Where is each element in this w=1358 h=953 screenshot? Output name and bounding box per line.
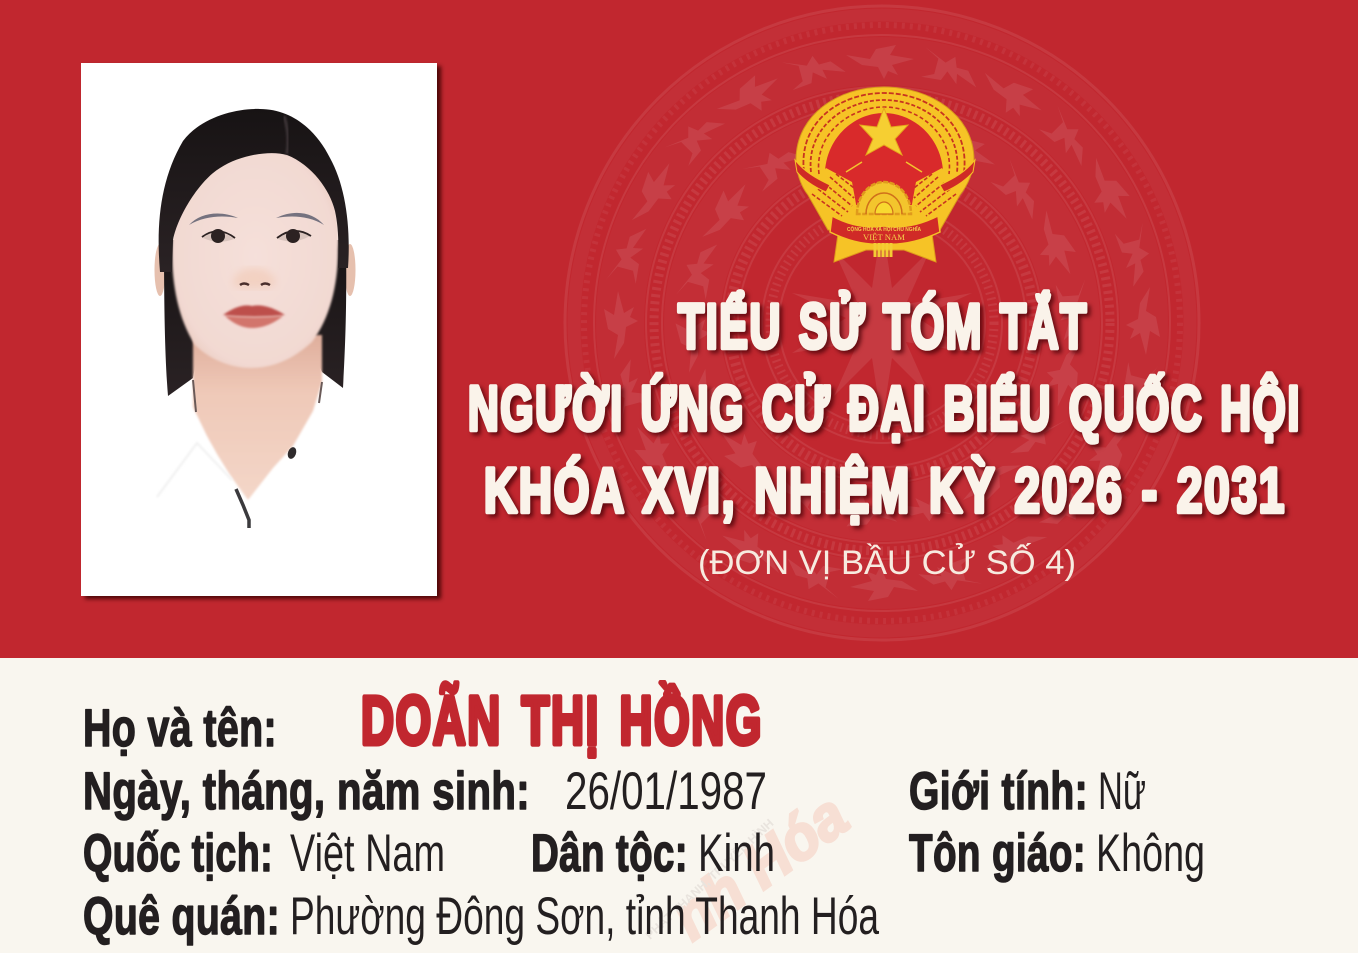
inner red disc — [825, 113, 943, 205]
base stripes — [834, 234, 936, 262]
watermark: Thanh Hóa: nh Hóa — [660, 781, 860, 953]
candidate name: DOÃN THỊ HỒNG — [361, 682, 763, 759]
label: full name: Họ và tên: — [83, 699, 277, 758]
value: ethnicity: Kinh — [698, 824, 775, 883]
wheat grain texture outer — [803, 93, 965, 172]
lips — [223, 305, 285, 328]
value: religion: Không — [1096, 824, 1205, 883]
wheat grain lines — [812, 174, 956, 216]
wheat grain texture middle — [811, 100, 957, 172]
national emblem — [795, 87, 975, 262]
hair parting — [284, 116, 288, 154]
biography fields — [83, 682, 1205, 946]
wheat grain texture inner — [819, 107, 949, 174]
back hair — [164, 240, 346, 396]
title line 1: TIỂU SỬ TÓM TẮT — [678, 291, 1088, 362]
red ribbons on wheat — [795, 160, 975, 192]
gear semicircle — [857, 182, 911, 214]
label: hometown: Quê quán: — [83, 887, 280, 946]
portrait photo — [81, 63, 437, 596]
wreath outer disc — [796, 87, 974, 230]
face — [172, 144, 339, 368]
panel: red header — [0, 0, 1358, 658]
wheat stems — [846, 162, 922, 172]
label: nationality: Quốc tịch: — [83, 824, 273, 883]
value: hometown: Phường Đông Sơn, tỉnh Thanh Hóa — [290, 887, 879, 946]
watermark: Thanh Hóa: PHÁT THANH, TRUYỀN HÌNH — [642, 815, 776, 942]
shirt button — [286, 446, 298, 460]
collar shadow — [193, 380, 322, 412]
wheat bundles — [808, 168, 960, 222]
value: nationality: Việt Nam — [290, 824, 445, 883]
label: date of birth: Ngày, tháng, năm sinh: — [83, 762, 530, 821]
emblem text: CỘNG HÒA XÃ HỘI CHỦ NGHĨA — [847, 225, 921, 233]
subtitle: (ĐƠN VỊ BẦU CỬ SỐ 4) — [698, 543, 1076, 582]
value: date of birth: 26/01/1987 — [565, 762, 767, 821]
photo paper with shadow — [81, 63, 437, 596]
bronze drum background pattern — [565, 6, 1199, 640]
label: ethnicity: Dân tộc: — [531, 824, 688, 883]
eyes — [202, 229, 311, 243]
gold star — [860, 108, 908, 155]
label: gender: Giới tính: — [909, 762, 1088, 821]
central bars — [875, 243, 891, 257]
value: gender: Nữ — [1098, 762, 1146, 821]
title — [468, 291, 1301, 526]
ears — [154, 244, 356, 296]
hair top — [159, 109, 349, 272]
label: religion: Tôn giáo: — [909, 824, 1086, 883]
nose — [232, 268, 277, 288]
neck — [193, 335, 322, 500]
eyebrows — [189, 213, 324, 225]
emblem text: Việt Nam: VIỆT NAM — [863, 232, 905, 242]
main scroll ribbon — [830, 216, 940, 244]
shirt placket — [236, 489, 249, 528]
shirt collar edge — [157, 443, 232, 497]
